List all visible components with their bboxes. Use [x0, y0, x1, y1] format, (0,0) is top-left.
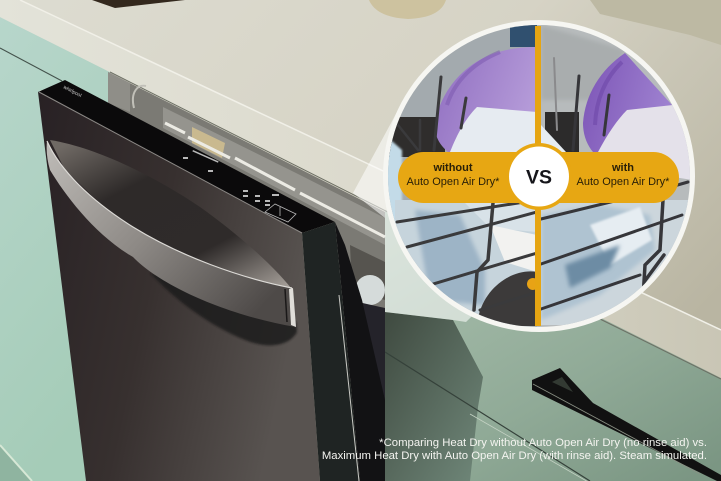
purple plate: [435, 47, 537, 152]
white bowl: [450, 107, 537, 152]
label: with: with: [611, 162, 634, 174]
cabinet drawer pull: [532, 368, 721, 481]
yellow vertical divider: [535, 26, 541, 326]
footnote: Maximum Heat Dry with Auto Open Air Dry (with rinse aid). Steam simulated.: [322, 450, 707, 462]
bowl on counter top: [369, 0, 446, 19]
brand logo: whirlpool: [62, 84, 82, 99]
right photo: with air dry: [537, 20, 692, 330]
control panel top: [38, 80, 335, 233]
lower dishes: [541, 200, 691, 325]
handle bar: [47, 141, 296, 327]
purple plate: [583, 53, 672, 152]
backsplash at top right: [590, 0, 721, 45]
counter front edge: [0, 0, 721, 379]
tines and rack: [397, 77, 537, 310]
label: without: without: [432, 162, 473, 174]
dark object on counter top: [92, 0, 185, 8]
white ring: [383, 20, 695, 332]
mint cabinet wall on the left: [0, 17, 110, 481]
label: without: Auto Open Air Dry*: [407, 176, 500, 188]
footnote: *Comparing Heat Dry without Auto Open Air Dry (no rinse aid) vs.: [379, 437, 707, 449]
cabinet front below the dishwasher opening: [385, 205, 721, 481]
handle recess: [50, 140, 291, 288]
white bowl: [598, 105, 692, 180]
door side edge: [302, 222, 360, 481]
dishwasher door: [38, 80, 385, 481]
label: with: Auto Open Air Dry*: [577, 176, 670, 188]
lower dishes: [395, 200, 537, 325]
tines and rack: [541, 58, 688, 309]
door front panel: [38, 92, 320, 481]
handle shadow: [150, 273, 297, 345]
left photo: without air dry: [385, 20, 692, 330]
yellow label band: [398, 152, 679, 203]
magnifier light cone: [353, 112, 540, 322]
magnifier circle comparison: [383, 20, 695, 332]
VS badge: VS: [526, 166, 552, 188]
dishwasher tub interior behind door: [108, 72, 385, 481]
control buttons: [183, 150, 296, 222]
VS badge: [506, 143, 572, 210]
